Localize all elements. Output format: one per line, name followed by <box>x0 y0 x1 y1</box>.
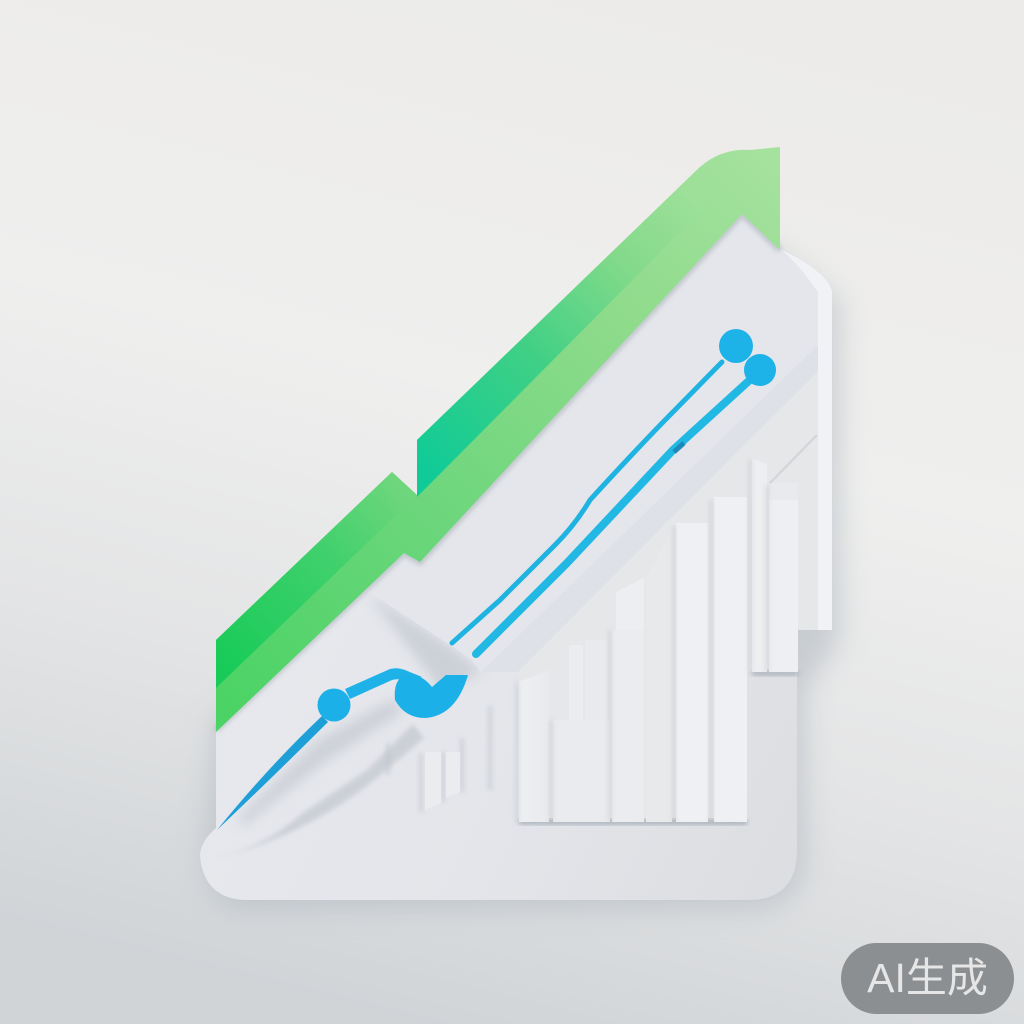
arrow teal band <box>417 167 722 497</box>
lower swoosh shadow <box>217 724 424 858</box>
card shadow <box>205 240 840 908</box>
dark spot on line <box>674 443 684 452</box>
arrow dark band <box>216 472 417 688</box>
upper line <box>452 362 722 643</box>
left connector <box>345 668 422 699</box>
back bar <box>646 528 672 822</box>
bar <box>553 720 610 822</box>
bar <box>612 630 644 822</box>
badge: AI generated: AI生成 <box>867 955 988 1001</box>
bar shadow right <box>752 670 798 676</box>
lower line <box>476 378 752 654</box>
arrow shadow <box>216 214 780 730</box>
back bar <box>569 645 583 822</box>
green arrow <box>216 147 780 732</box>
blue trend lines <box>217 329 776 830</box>
bar <box>769 500 798 672</box>
back bar <box>752 458 767 672</box>
upper fold panel <box>366 214 818 672</box>
right edge highlight <box>782 250 832 630</box>
bar <box>519 670 549 822</box>
bar <box>714 497 747 822</box>
arrow main band <box>216 147 780 732</box>
bar <box>676 523 708 822</box>
left node <box>318 688 350 722</box>
bar chart <box>517 435 817 825</box>
back bar <box>616 578 644 822</box>
back bar <box>585 640 607 822</box>
bar shadow <box>519 819 747 825</box>
blob node <box>395 674 468 718</box>
small faded bar fills <box>425 752 460 810</box>
bar edge shadows <box>517 460 767 822</box>
badge: AI generated <box>841 943 1014 1014</box>
small faded bars <box>388 706 490 812</box>
left tapered line <box>217 716 328 830</box>
fold shadow <box>366 592 482 690</box>
bar top <box>769 483 798 500</box>
upper swoosh shadow <box>238 698 402 826</box>
lower panel behind bars <box>518 372 818 822</box>
upper node <box>719 329 753 363</box>
card: white base <box>200 214 832 900</box>
lower node <box>744 354 776 386</box>
fold lower edge strip <box>481 345 818 672</box>
upper right diagonal edge <box>770 435 817 483</box>
